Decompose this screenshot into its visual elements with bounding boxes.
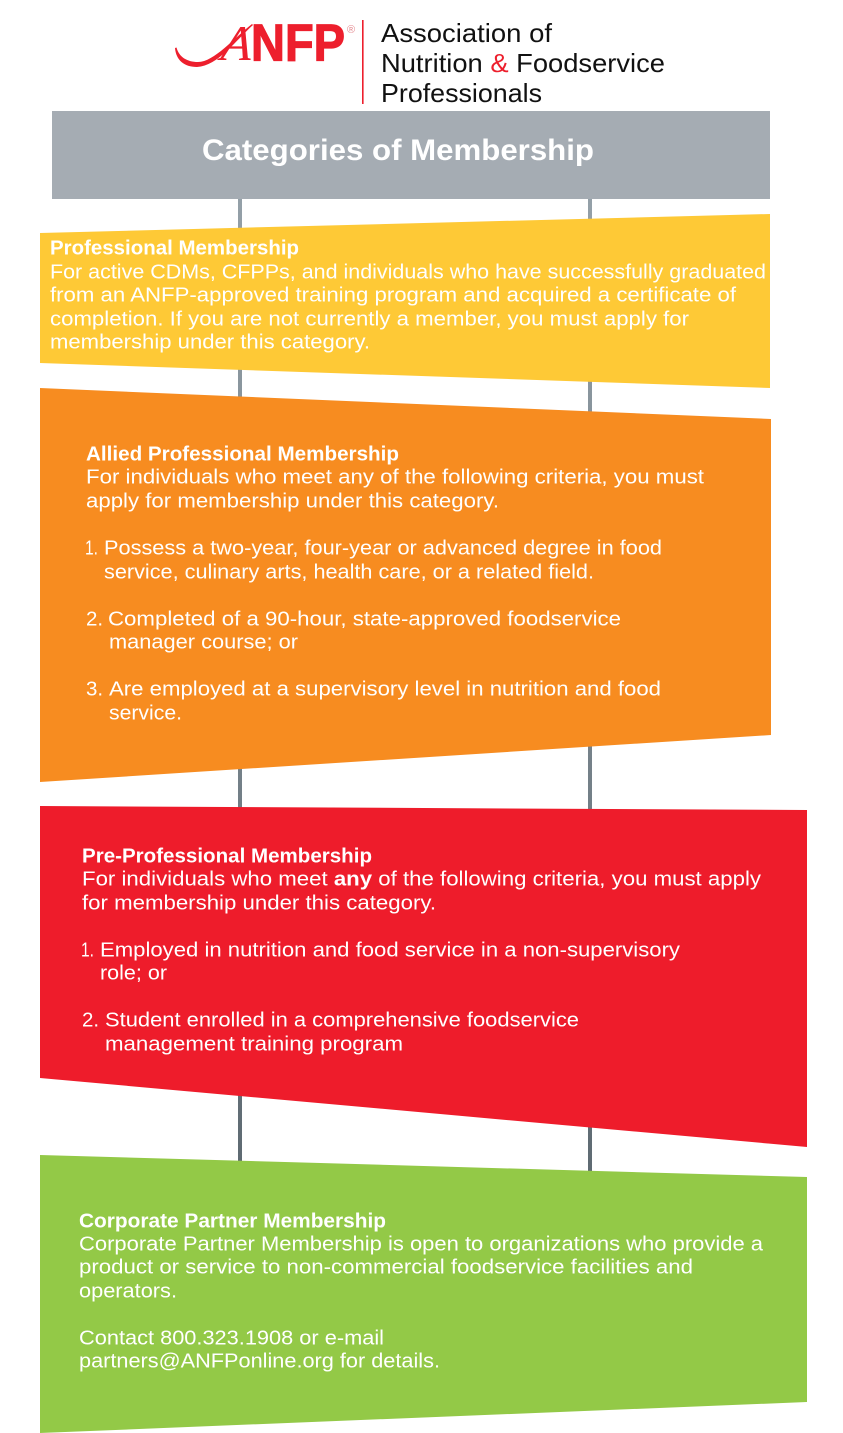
contact details: partners@ANFPonline.org for details. — [79, 1350, 440, 1373]
registered mark: ® — [347, 24, 355, 36]
criterion 3: Are employed at a supervisory level in nutrition and food — [109, 678, 661, 701]
title: Categories of Membership — [202, 134, 594, 167]
criterion 2: 2. — [82, 1009, 99, 1032]
description: completion. If you are not currently a member, you must apply for — [50, 308, 689, 331]
criterion 1: Possess a two-year, four-year or advanced degree in food — [104, 537, 662, 560]
criterion 3: service. — [109, 702, 182, 725]
criterion 1: role; or — [100, 962, 167, 985]
criterion 2: 2. — [86, 608, 103, 631]
connector: left line — [238, 199, 242, 1169]
contact details — [79, 1327, 440, 1373]
association name: Professionals — [381, 78, 542, 108]
association name: Association of — [381, 18, 553, 48]
criterion 1: Employed in nutrition and food service in a non-supervisory — [100, 939, 681, 962]
criterion 2: Student enrolled in a comprehensive foodservice — [105, 1009, 579, 1032]
criterion 2 — [86, 608, 621, 654]
criterion 1: 1. — [81, 939, 94, 962]
logo — [175, 14, 665, 108]
association name — [381, 18, 665, 108]
description — [50, 261, 766, 354]
criterion 1 — [81, 939, 681, 985]
criterion 2: manager course; or — [109, 631, 298, 654]
criterion 1: 1. — [85, 537, 98, 560]
connector: right line — [588, 199, 592, 1184]
description: operators. — [79, 1280, 177, 1303]
criterion 1 — [85, 537, 662, 584]
criterion 3: 3. — [86, 678, 103, 701]
logo letters NFP: NFP — [251, 14, 345, 72]
logo letter A: A — [216, 15, 256, 71]
description: from an ANFP-approved training program and acquired a certificate of — [50, 284, 736, 307]
intro: For individuals who meet any of the following criteria, you must apply — [82, 868, 762, 891]
contact details: Contact 800.323.1908 or e-mail — [79, 1327, 384, 1350]
description — [79, 1233, 764, 1303]
intro — [82, 868, 762, 915]
criterion 2: management training program — [105, 1033, 403, 1056]
logo divider — [362, 20, 364, 104]
heading: Allied Professional Membership — [86, 443, 399, 466]
panel: corporate partner membership — [40, 1155, 807, 1433]
heading: Corporate Partner Membership — [79, 1210, 386, 1233]
description: For active CDMs, CFPPs, and individuals who have successfully graduated — [50, 261, 766, 284]
intro: for membership under this category. — [82, 892, 436, 915]
heading: Pre-Professional Membership — [82, 845, 372, 868]
intro: apply for membership under this category. — [86, 490, 499, 513]
panel: pre-professional membership — [40, 806, 807, 1147]
panel: allied professional membership — [40, 388, 771, 782]
panel: professional membership — [40, 214, 770, 388]
heading: Professional Membership — [50, 237, 299, 260]
intro: For individuals who meet any of the following criteria, you must — [86, 466, 704, 489]
intro — [86, 466, 704, 513]
description: product or service to non-commercial foodservice facilities and — [79, 1256, 693, 1279]
criterion 3 — [86, 678, 661, 725]
criterion 2 — [82, 1009, 579, 1056]
criterion 2: Completed of a 90-hour, state-approved foodservice — [108, 608, 621, 631]
icon: ANFP swoosh — [175, 24, 253, 67]
title banner — [52, 111, 770, 199]
criterion 1: service, culinary arts, health care, or a related field. — [104, 561, 594, 584]
description: membership under this category. — [50, 331, 370, 354]
association name: Nutrition & Foodservice — [381, 48, 665, 78]
description: Corporate Partner Membership is open to organizations who provide a — [79, 1233, 764, 1256]
